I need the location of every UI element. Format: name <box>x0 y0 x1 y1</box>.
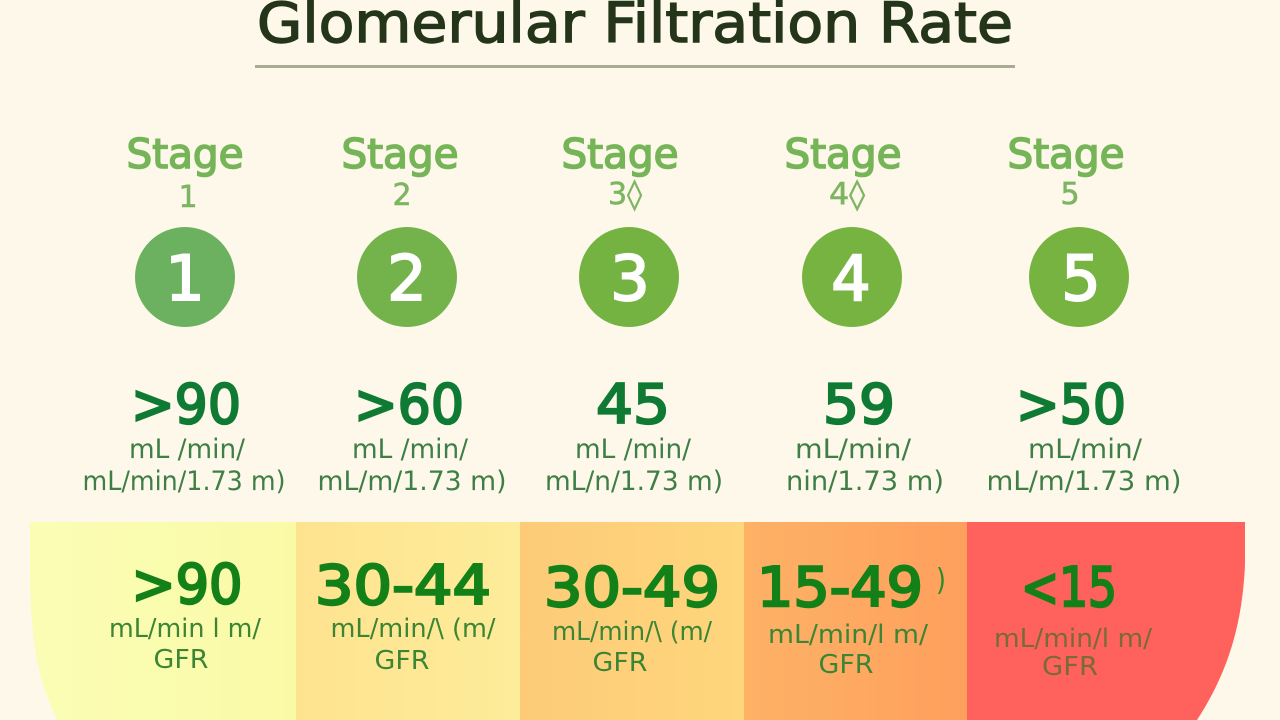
text block: stage 5 value <box>986 373 1182 497</box>
text block: stage 1 value: >90 <box>131 373 241 436</box>
icon: stage 3 badge <box>579 227 679 327</box>
text block: bar segment 4: ) <box>936 563 946 598</box>
icon: stage 3 badge: 3 <box>610 242 650 315</box>
panel: stage 3 header: 3◊ <box>608 177 642 212</box>
text block: bar segment 2: mL/min/\ (m/ <box>330 614 496 644</box>
text block: bar segment 5: mL/min/l m/ <box>994 624 1152 654</box>
icon: stage 1 badge: 1 <box>165 242 205 315</box>
text block: bar segment 5 <box>994 556 1152 682</box>
panel: GFR colour bar <box>30 522 1245 720</box>
panel: stage 4 header: 4◊ <box>829 177 865 212</box>
text block: bar segment 5: GFR <box>1042 652 1098 682</box>
icon: stage 4 badge: 4 <box>831 242 871 315</box>
text block: bar segment 5: <15 <box>1021 556 1117 619</box>
text block: bar segment 4: GFR <box>818 650 874 680</box>
panel: stage 2 header: 2 <box>392 178 412 213</box>
text block: stage 2 value: mL /min/ <box>352 434 469 465</box>
text block: stage 5 value: mL/min/ <box>1028 434 1143 465</box>
text block: bar segment 1: GFR <box>154 645 208 675</box>
text block: bar segment 2: 30-44 <box>315 554 491 617</box>
text block: stage 2 value: mL/m/1.73 m) <box>318 466 506 497</box>
text block: bar segment 4: 15-49 <box>757 556 923 619</box>
text block: stage 3 value: 45 <box>596 373 670 436</box>
panel: stage 3 header: Stage <box>562 130 678 178</box>
text block: stage 4 value: nin/1.73 m) <box>786 466 944 497</box>
text block: stage 4 value <box>786 373 944 497</box>
text block: bar segment 4: mL/min/l m/ <box>768 620 928 650</box>
text block: bar segment 1: mL/min l m/ <box>109 614 261 644</box>
text block: bar segment 4 <box>757 556 946 680</box>
icon: stage 1 badge <box>135 227 235 327</box>
panel: stage 3 header <box>562 130 679 327</box>
text block: bar segment 3 <box>544 556 720 678</box>
text block: stage 4 value: mL/min/ <box>795 434 912 465</box>
panel: stage 4 header: Stage <box>784 130 902 178</box>
panel: stage 2 header: Stage <box>342 130 458 178</box>
icon: stage 5 badge <box>1029 227 1129 327</box>
icon: stage 2 badge <box>357 227 457 327</box>
text block: stage 2 value: >60 <box>354 373 464 436</box>
text block: stage 1 value: mL/min/1.73 m) <box>82 466 286 497</box>
text block: stage 5 value: mL/m/1.73 m) <box>986 466 1182 497</box>
text block: bar segment 2 <box>315 554 496 676</box>
panel: stage 5 header: Stage <box>1008 130 1124 178</box>
text block: stage 4 value: 59 <box>823 373 895 436</box>
icon: stage 4 badge <box>802 227 902 327</box>
text block: bar segment 1: >90 <box>132 553 242 616</box>
panel: stage 1 header <box>126 130 244 327</box>
panel: stage 1 header: 1 <box>178 180 198 215</box>
panel: stage 1 header: Stage <box>126 130 244 178</box>
text block: bar segment 2: GFR <box>374 646 430 676</box>
text block: bar segment 1 <box>109 553 261 675</box>
panel: stage 5 header: 5 <box>1060 177 1080 212</box>
icon: stage 5 badge: 5 <box>1061 242 1101 315</box>
text block: stage 3 value: mL /min/ <box>575 434 692 465</box>
panel: stage 5 header <box>1008 130 1129 327</box>
text block: stage 1 value: mL /min/ <box>129 434 246 465</box>
text block: bar segment 3: 30-49 <box>544 556 720 619</box>
text block: stage 1 value <box>82 373 286 497</box>
icon: stage 2 badge: 2 <box>387 242 427 315</box>
text block: stage 3 value: mL/n/1.73 m) <box>545 466 723 497</box>
text block: bar segment 3: mL/min/\ (m/ <box>552 617 712 647</box>
text block: bar segment 3: GFR <box>592 648 648 678</box>
panel: stage 4 header <box>784 130 902 327</box>
text block: stage 3 value <box>545 373 723 497</box>
panel: stage 2 header <box>342 130 458 327</box>
text block: stage 2 value <box>318 373 506 497</box>
text block: stage 5 value: >50 <box>1016 373 1126 436</box>
